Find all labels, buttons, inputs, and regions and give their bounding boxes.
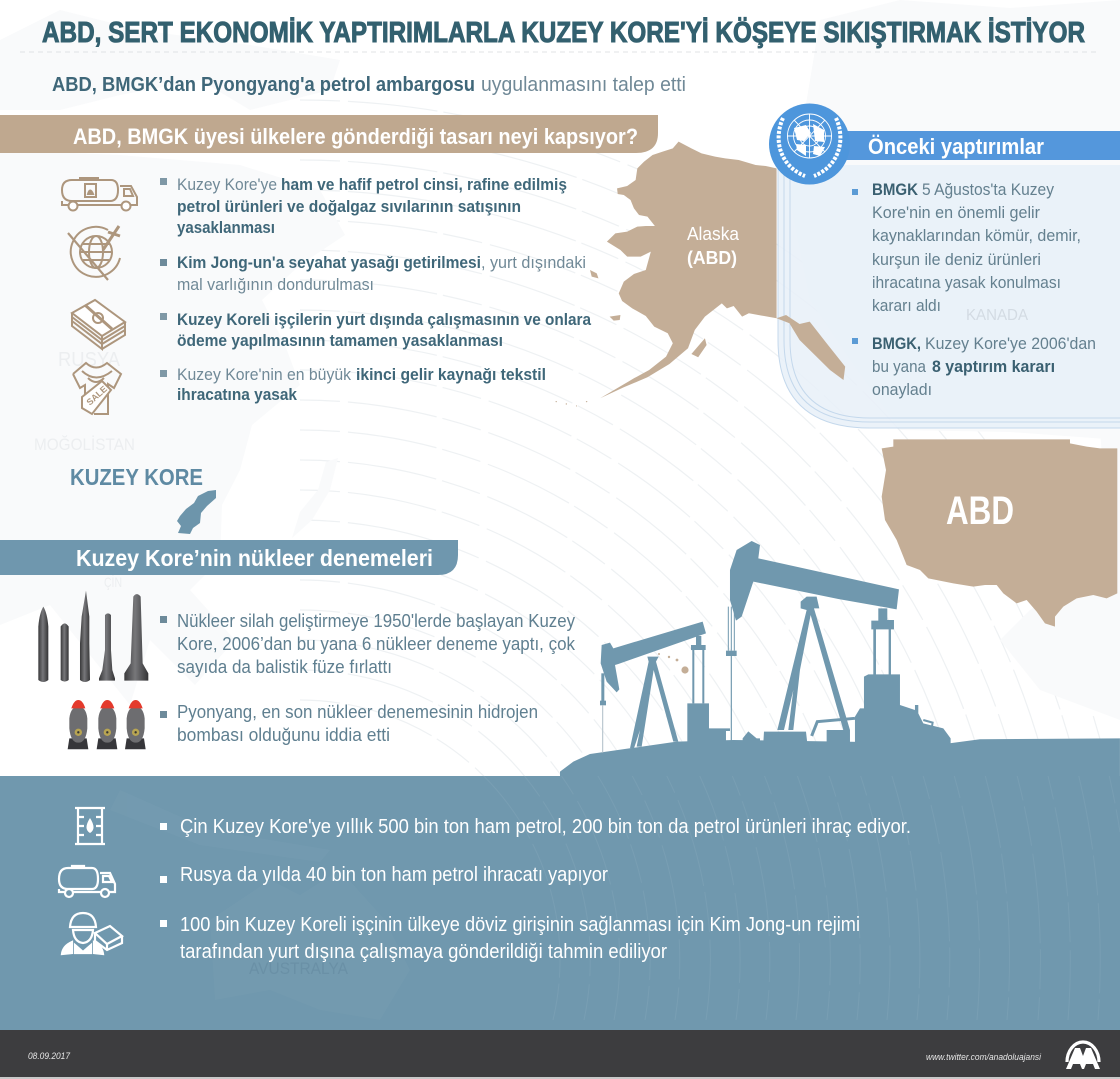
bullet: workers abroad xyxy=(160,914,860,963)
sanctions bullet 2: bu yana xyxy=(872,357,926,376)
icon: textile sale: SALE xyxy=(84,384,109,407)
sanctions bullet 2: BMGK, xyxy=(872,334,921,353)
sanctions bullet 2: Kuzey Kore'ye 2006'dan xyxy=(925,334,1096,353)
label: ABD: ABD xyxy=(946,489,1014,533)
sanctions bullet 1: Kore'nin en önemli gelir xyxy=(872,203,1040,222)
icon: UN emblem xyxy=(769,104,850,184)
map label: Rusya: RUSYA xyxy=(58,349,121,371)
icon: banned travel globe xyxy=(68,226,120,280)
map label: Kanada: KANADA xyxy=(966,307,1028,324)
label: North Korea: KUZEY KORE xyxy=(70,464,203,490)
faint map over the band xyxy=(110,790,410,1020)
bullet: travel ban: , yurt dışındaki xyxy=(481,253,586,272)
date: 08.09.2017 xyxy=(28,1051,71,1061)
subtitle: uygulanmasını talep etti xyxy=(481,74,686,96)
bullet: hydrogen bomb claim xyxy=(160,702,538,745)
bullet: oil sales ban: petrol ürünleri ve doğalgaz sıvılarının satışının xyxy=(177,197,521,216)
bullet: oil sales ban: yasaklanması xyxy=(177,218,275,237)
heading band: draft resolution xyxy=(0,115,658,153)
heading band: nuclear tests xyxy=(0,540,458,575)
bullet: oil sales ban xyxy=(160,175,567,237)
map label: Çin: ÇİN xyxy=(104,573,122,590)
bullet: travel ban xyxy=(160,253,586,294)
icon: worker with money xyxy=(62,913,122,954)
icon: tanker truck xyxy=(59,866,115,897)
sanctions bullet 1: kurşun ile deniz ürünleri xyxy=(872,250,1041,269)
bullet: oil sales ban: Kuzey Kore'ye xyxy=(177,175,277,194)
sanctions bullet 1: kararı aldı xyxy=(872,296,941,315)
sanctions bullet 1: BMGK xyxy=(872,180,919,199)
icon: bombs xyxy=(68,700,146,749)
sanctions bullet 2: onayladı xyxy=(872,380,932,399)
bullet: travel ban: mal varlığının dondurulması xyxy=(177,275,374,294)
bullet: nuclear development: Nükleer silah geliştirmeye 1950'lerde başlayan Kuzey xyxy=(177,611,575,631)
bullet: workers ban: Kuzey Koreli işçilerin yurt dışında çalışmasının ve onlara xyxy=(177,310,591,329)
heading band xyxy=(840,131,1120,160)
panel: previous sanctions xyxy=(778,131,1120,428)
label: ABD: (ABD) xyxy=(687,248,737,268)
footer xyxy=(0,1030,1120,1079)
heading text: ABD, BMGK üyesi ülkelere gönderdiği tasarı neyi kapsıyor? xyxy=(73,124,638,149)
sanctions bullet 2: 8 yaptırım kararı xyxy=(932,357,1055,376)
label: Alaska: Alaska xyxy=(687,224,740,244)
panel: bottom oil facts band xyxy=(0,541,1120,1030)
bullet: textile ban xyxy=(160,365,546,404)
icon: missiles xyxy=(38,591,148,682)
illustration: oil pumpjacks xyxy=(560,541,1120,790)
faint concentric ocean lines xyxy=(300,100,1120,1020)
bullet: workers ban xyxy=(160,310,591,350)
map: Hawaii xyxy=(658,653,689,674)
bullet: travel ban: Kim Jong-un'a seyahat yasağı getirilmesi xyxy=(177,253,481,272)
bullet: nuclear development: Kore, 2006’dan bu yana 6 nükleer deneme yaptı, çok xyxy=(177,634,576,654)
heading text: Kuzey Kore’nin nükleer denemeleri xyxy=(76,545,433,571)
bullet: nuclear development: sayıda da balistik füze fırlattı xyxy=(177,657,392,677)
icon: fuel truck xyxy=(62,178,137,210)
bullet: textile ban: Kuzey Kore'nin en büyük xyxy=(177,365,351,384)
bullet: hydrogen bomb claim: bombası olduğunu iddia etti xyxy=(177,725,390,745)
bullet: oil sales ban: ham ve hafif petrol cinsi, rafine edilmiş xyxy=(281,175,567,194)
icon: oil barrel xyxy=(75,808,105,844)
bullet: textile ban: ikinci gelir kaynağı tekstil xyxy=(356,365,546,384)
map label: Moğolistan: MOĞOLİSTAN xyxy=(34,435,135,454)
map: North Korea xyxy=(177,490,216,534)
bullet: workers abroad: tarafından yurt dışına çalışmaya gönderildiği tahmin ediliyor xyxy=(180,941,667,963)
bullet: Russia exports: Rusya da yılda 40 bin ton ham petrol ihracatı yapıyor xyxy=(180,864,608,886)
sanctions bullet 2 xyxy=(852,334,1096,399)
bullet: nuclear development xyxy=(160,611,576,677)
sanctions bullet 1: ihracatına yasak konulması xyxy=(872,273,1061,292)
bullet: China exports: Çin Kuzey Kore'ye yıllık 500 bin ton ham petrol, 200 bin ton da petrol ürünleri ihraç ediyor. xyxy=(180,816,911,838)
icon: stack of money xyxy=(72,300,125,349)
map label: Avustralya: AVUSTRALYA xyxy=(249,959,349,978)
bullet: workers ban: ödeme yapılmasının tamamen yasaklanması xyxy=(177,331,503,350)
icon: textile sale xyxy=(73,363,121,414)
sanctions bullet 1: kaynaklarından kömür, demir, xyxy=(872,226,1081,245)
faint world map background xyxy=(0,0,1120,720)
heading text: Önceki yaptırımlar xyxy=(868,134,1044,159)
subtitle: ABD, BMGK’dan Pyongyang'a petrol ambargosu xyxy=(52,74,475,96)
map: mainland USA xyxy=(882,439,1117,627)
twitter address: www.twitter.com/anadoluajansi xyxy=(926,1052,1042,1063)
sanctions bullet 1 xyxy=(852,180,1081,315)
logo: AA xyxy=(1066,1042,1100,1069)
bullet: workers abroad: 100 bin Kuzey Koreli işçinin ülkeye döviz girişinin sağlanması için Kim Jong-un rejimi xyxy=(180,914,860,936)
bullet: hydrogen bomb claim: Pyonyang, en son nükleer denemesinin hidrojen xyxy=(177,702,538,722)
bullet: textile ban: ihracatına yasak xyxy=(177,385,297,404)
sanctions bullet 1: 5 Ağustos'ta Kuzey xyxy=(922,180,1054,199)
map: Alaska xyxy=(556,142,845,407)
